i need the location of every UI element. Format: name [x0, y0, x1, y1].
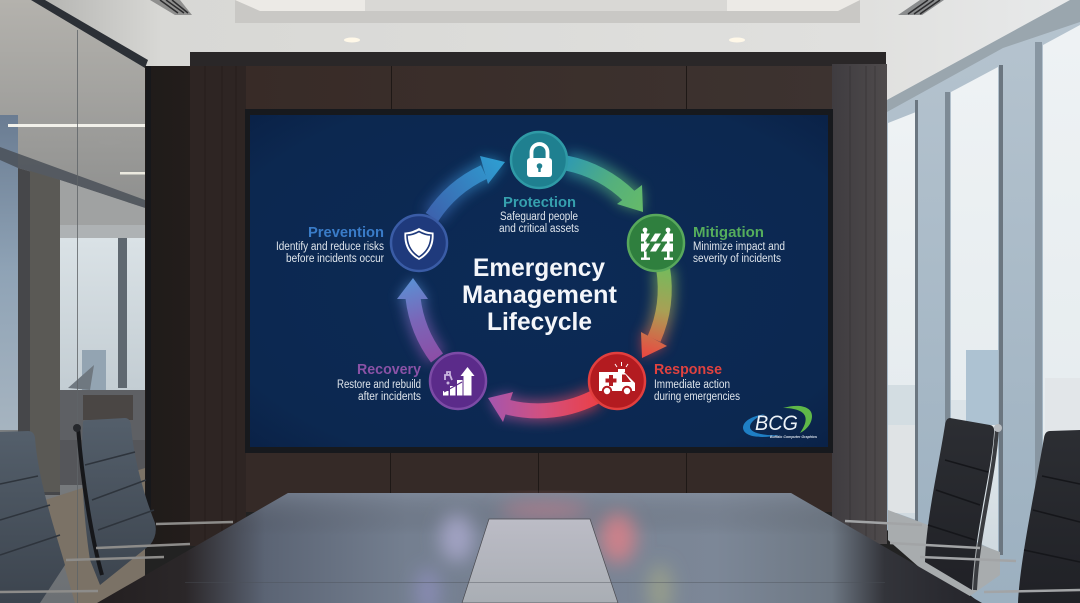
icon: ambulance [599, 362, 635, 395]
chair: right far edge [984, 430, 1080, 603]
chair: right near window [845, 418, 1016, 590]
text block: prevention [276, 224, 384, 265]
text block: prevention: before incidents occur [286, 253, 384, 265]
text block: recovery: Recovery [357, 361, 422, 378]
node: mitigation [628, 215, 684, 271]
glass partition [0, 0, 148, 603]
text block: recovery: after incidents [358, 391, 421, 403]
window wall [887, 0, 1080, 603]
icon: rising bars and arrow [443, 367, 474, 396]
text block: mitigation [693, 224, 785, 265]
text block: protection: Safeguard people [500, 211, 578, 223]
text block: mitigation: Minimize impact and [693, 241, 785, 253]
icon: road barrier [641, 228, 673, 260]
table centre inlay [462, 519, 618, 603]
heading: Emergency Management Lifecycle: Lifecycle [487, 308, 592, 336]
wood wall [145, 52, 887, 546]
arrow: recovery to prevention [397, 278, 437, 358]
logo: BCG: BCG [755, 412, 798, 435]
chair: left near [0, 431, 98, 603]
display screen [250, 115, 828, 447]
heading: Emergency Management Lifecycle: Management [462, 281, 618, 309]
text block: response: Immediate action [654, 379, 730, 391]
heading: Emergency Management Lifecycle: Emergency [473, 254, 605, 282]
arrow: protection to mitigation [566, 163, 643, 212]
arrow: response to recovery [488, 392, 597, 422]
node: protection [511, 132, 567, 188]
chair: left far [66, 418, 233, 585]
text block: mitigation: severity of incidents [693, 253, 781, 265]
node: recovery [430, 353, 486, 409]
arrow: mitigation to response [641, 268, 667, 358]
text block: protection: and critical assets [499, 223, 579, 235]
icon: padlock [527, 144, 552, 177]
conference table [97, 493, 982, 603]
skyline outside windows [888, 350, 1080, 513]
heading: Emergency Management Lifecycle [462, 254, 618, 336]
text block: response: during emergencies [654, 391, 740, 403]
text block: prevention: Prevention [308, 224, 384, 241]
arrow: prevention to protection [432, 156, 505, 217]
arrow glow layer [397, 156, 667, 422]
lifecycle diagram [276, 132, 818, 439]
text block: recovery [337, 361, 422, 403]
node: prevention [391, 215, 447, 271]
ceiling [0, 0, 1080, 130]
node: response [589, 353, 645, 409]
display bezel [245, 109, 833, 453]
icon: shield [404, 228, 434, 260]
text block: response [654, 361, 740, 403]
text block: protection [499, 194, 579, 235]
text block: protection: Protection [503, 194, 576, 211]
text block: mitigation: Mitigation [693, 224, 764, 241]
text block: prevention: Identify and reduce risks [276, 241, 384, 253]
text block: recovery: Restore and rebuild [337, 379, 421, 391]
text block: response: Response [654, 361, 722, 378]
screen reflection on table [416, 502, 672, 603]
logo: BCG: Buffalo Computer Graphics [770, 434, 818, 439]
logo: BCG [743, 406, 818, 439]
